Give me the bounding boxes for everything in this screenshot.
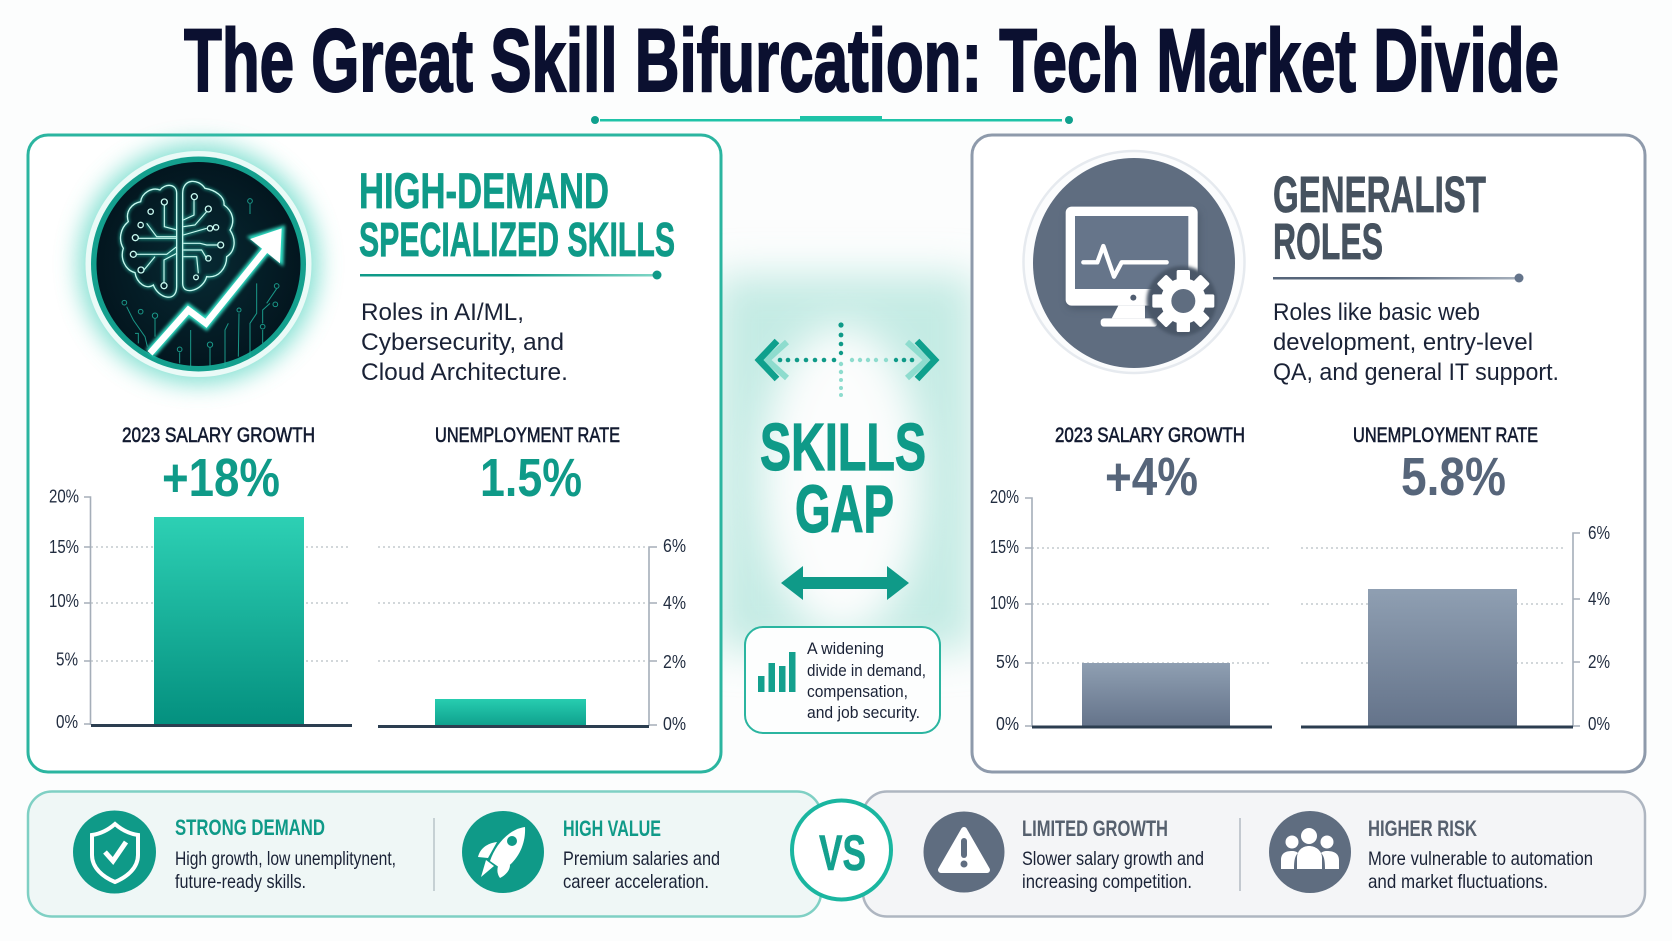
chart: unemployment rate, high-demand — [378, 424, 686, 734]
strip frame — [863, 792, 1645, 916]
chart: salary growth, high-demand: 20% — [49, 486, 79, 506]
chart: unemployment rate, high-demand: 1.5% — [480, 448, 582, 508]
double-headed arrow — [781, 566, 909, 600]
item: strong demand: future-ready skills. — [175, 871, 306, 893]
heading — [1273, 166, 1486, 270]
heading: GENERALIST — [1273, 166, 1486, 223]
item: limited growth: LIMITED GROWTH — [1022, 816, 1168, 841]
chart: salary growth, high-demand — [49, 424, 352, 732]
icon: warning — [924, 812, 1004, 892]
chart: salary growth, generalist: 2023 SALARY GROWTH — [1055, 424, 1245, 447]
chart: unemployment rate, generalist: 4% — [1588, 589, 1610, 609]
item: high value: career acceleration. — [563, 871, 709, 893]
description: Cybersecurity, and — [361, 329, 564, 356]
item: high value — [563, 816, 720, 893]
item: strong demand: High growth, low unemplitynent, — [175, 848, 396, 870]
chart: salary growth, high-demand: 10% — [49, 591, 79, 611]
heading: skills gap: SKILLS — [760, 410, 926, 485]
description: development, entry-level — [1273, 329, 1533, 356]
item: higher risk: HIGHER RISK — [1368, 816, 1477, 841]
strip frame — [28, 792, 821, 916]
strip: specialized benefits — [28, 792, 821, 916]
chart: salary growth, generalist: +4% — [1105, 447, 1198, 507]
chart: unemployment rate, high-demand: 6% — [663, 536, 686, 556]
chart: unemployment rate, high-demand: UNEMPLOYMENT RATE — [435, 424, 620, 447]
chart: salary growth, generalist: 5% — [996, 652, 1019, 672]
panel frame — [972, 135, 1645, 772]
description: Cloud Architecture. — [361, 359, 568, 386]
icon: monitor with gear — [1024, 151, 1244, 373]
item: higher risk: More vulnerable to automation — [1368, 848, 1593, 870]
chart: salary growth, high-demand: 5% — [56, 650, 78, 670]
title rule — [591, 116, 1073, 124]
icon: bars — [758, 652, 796, 692]
chart: salary growth, generalist — [990, 424, 1272, 734]
chart: unemployment rate, generalist: 0% — [1588, 714, 1610, 734]
vs badge — [792, 800, 891, 900]
description: Roles in AI/ML, — [361, 299, 524, 326]
icon: rocket — [462, 811, 544, 893]
icon: shield — [73, 810, 156, 894]
chart: unemployment rate, generalist: 6% — [1588, 523, 1610, 543]
vs badge: VS — [819, 825, 866, 881]
item: strong demand: STRONG DEMAND — [175, 815, 325, 840]
panel: high-demand specialized skills — [28, 135, 721, 772]
chart: unemployment rate, generalist: UNEMPLOYMENT RATE — [1353, 424, 1538, 447]
item: limited growth: increasing competition. — [1022, 871, 1192, 893]
strip: generalist risks — [863, 792, 1645, 916]
heading: skills gap — [760, 410, 926, 547]
callout text: and job security. — [807, 704, 920, 722]
description: Roles like basic web — [1273, 299, 1480, 326]
heading: skills gap: GAP — [795, 472, 894, 547]
heading: HIGH-DEMAND — [359, 163, 609, 219]
heading rule — [360, 270, 662, 280]
center column: skills gap — [745, 322, 940, 733]
icon: diverging dotted arrows — [759, 322, 935, 397]
description — [361, 299, 568, 386]
icon: brain with rising arrow — [78, 144, 318, 384]
chart: salary growth, high-demand: 0% — [56, 712, 78, 732]
heading: ROLES — [1273, 213, 1383, 270]
heading — [359, 163, 675, 267]
item: limited growth — [1022, 816, 1204, 893]
callout text: divide in demand, — [807, 662, 926, 680]
chart: salary growth, generalist: 0% — [996, 714, 1019, 734]
item: limited growth: Slower salary growth and — [1022, 848, 1204, 870]
chart: salary growth, generalist: 10% — [990, 593, 1019, 613]
chart: unemployment rate, high-demand: 4% — [663, 593, 686, 613]
chart: unemployment rate, high-demand: 0% — [663, 714, 686, 734]
item: high value: Premium salaries and — [563, 848, 720, 870]
item: high value: HIGH VALUE — [563, 816, 661, 841]
item: higher risk: and market fluctuations. — [1368, 871, 1548, 893]
chart: salary growth, generalist: 20% — [990, 487, 1019, 507]
chart: unemployment rate, generalist: 2% — [1588, 652, 1610, 672]
callout text: compensation, — [807, 683, 908, 701]
item: higher risk — [1368, 816, 1593, 893]
callout text: A widening — [807, 640, 884, 658]
description — [1273, 299, 1559, 386]
chart: salary growth, high-demand: 2023 SALARY GROWTH — [122, 424, 315, 447]
chart: salary growth, high-demand: 15% — [49, 537, 79, 557]
chart: unemployment rate, high-demand: 2% — [663, 652, 686, 672]
chart: salary growth, generalist: 15% — [990, 537, 1019, 557]
icon: people — [1269, 811, 1351, 893]
panel frame — [28, 135, 721, 772]
chart: unemployment rate, generalist: 5.8% — [1401, 447, 1506, 507]
center glow background — [715, 275, 975, 650]
heading: SPECIALIZED SKILLS — [359, 214, 675, 267]
panel: generalist roles — [972, 135, 1645, 772]
heading rule — [1273, 274, 1524, 282]
chart: unemployment rate, generalist — [1301, 424, 1610, 734]
item: strong demand — [175, 815, 396, 893]
chart: salary growth, high-demand: +18% — [162, 448, 280, 508]
callout — [745, 627, 940, 733]
callout text — [807, 640, 926, 722]
description: QA, and general IT support. — [1273, 359, 1559, 386]
